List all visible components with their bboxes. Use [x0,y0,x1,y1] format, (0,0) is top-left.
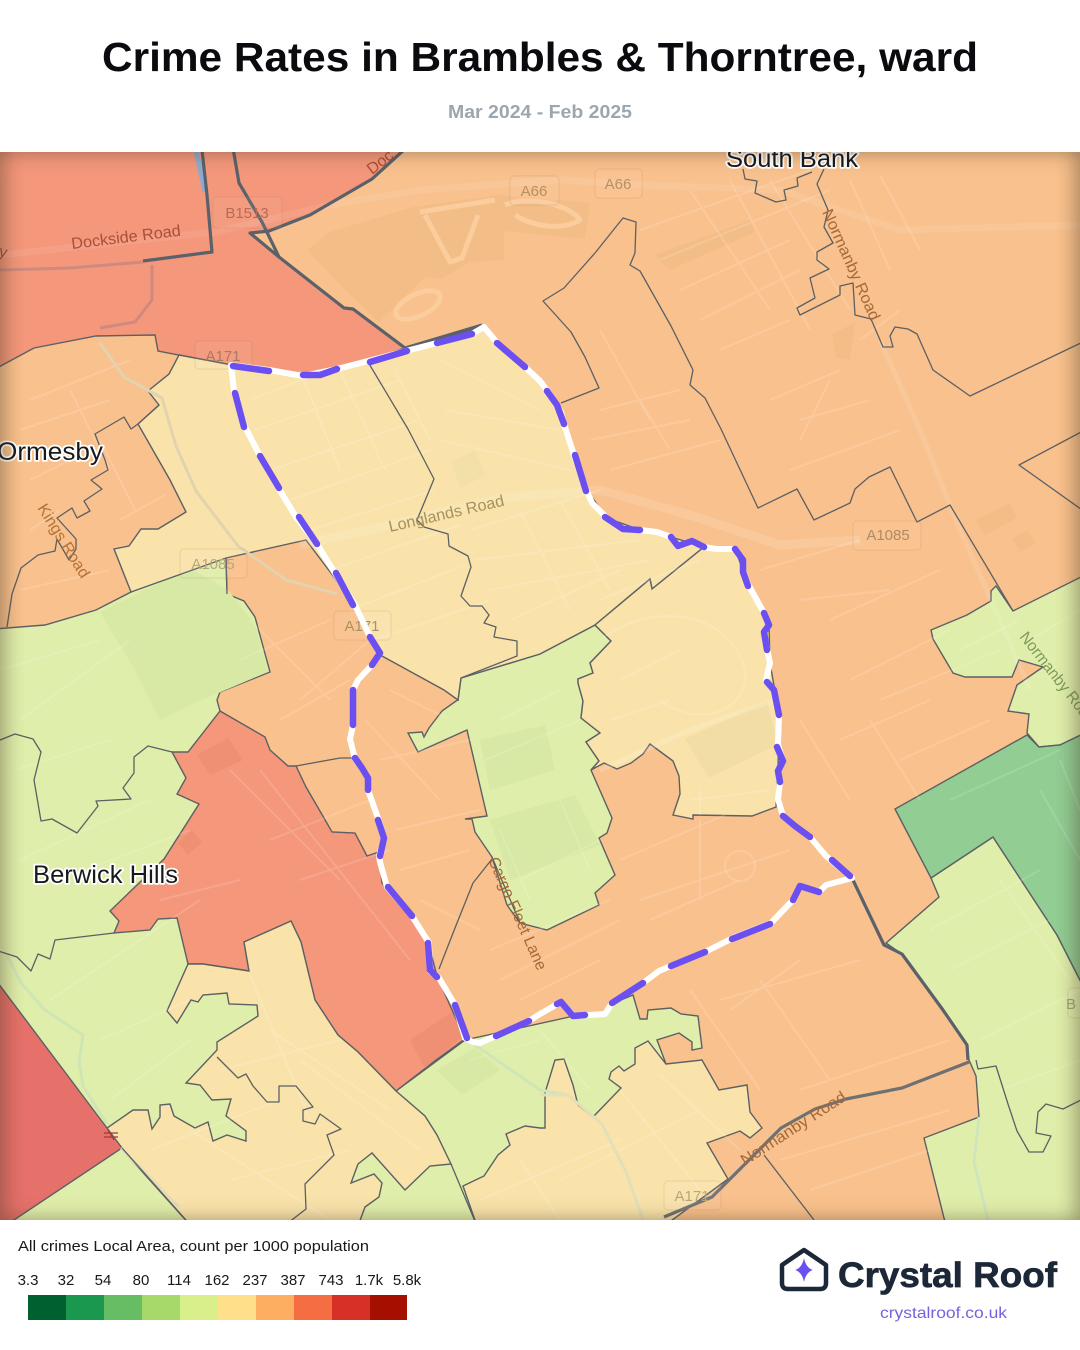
zone: yellow south-west [107,921,451,1226]
railway station marker [104,1130,118,1140]
legend scale values: 162 [204,1272,230,1289]
road shields: A171 [344,618,380,635]
leisure track shapes [392,200,580,325]
legend scale values: 743 [318,1272,344,1289]
road name labels [0,147,1080,1169]
zone: green west and south-west [0,558,702,1226]
streams and faint rail lines [0,262,988,1220]
salmon land-use patches [178,738,462,1068]
thick grey boundary roads [143,148,969,1217]
title: Crime Rates in Brambles & Thorntree, ward [102,34,978,80]
zone: light green north-east [931,575,1080,747]
road name labels: Longlands Road [387,493,506,536]
logo: Crystal Roof [780,1248,1058,1322]
choropleth map [0,152,1080,1220]
zone: yellow north ward [114,327,704,700]
legend colour ramp [28,1295,407,1320]
road name labels: Kings Road [34,501,93,581]
road shields [180,169,1080,1210]
zone: dark green east [895,733,1080,990]
legend scale values: 5.8k [393,1272,422,1289]
road shields: A66 [605,176,631,193]
boundary white casing [231,327,852,1043]
thin interior boundaries [0,169,1080,1226]
road name labels: Dockside Road [70,223,182,253]
legend scale values: 114 [167,1272,191,1289]
tinted land-use patches on orange [307,195,1036,552]
road shields: A171 [205,348,241,365]
base orange area [0,152,1080,1220]
canal [196,150,205,192]
map edge vignette [0,152,1080,1220]
road shields: B [1066,996,1076,1013]
legend scale values: 54 [95,1272,111,1289]
place name labels: Ormesby [0,438,104,466]
tan school patch [685,701,778,778]
road shields: B1513 [225,205,269,222]
place name labels [0,145,859,889]
zone: green inner ward [408,625,615,930]
legend scale values: 80 [133,1272,149,1289]
road shields: A171 [674,1188,710,1205]
ward boundary [231,327,852,1043]
zone: salmon south-west [110,711,465,1091]
date range subtitle: Mar 2024 - Feb 2025 [448,102,632,122]
road shields: A1085 [866,527,910,544]
place name labels: Berwick Hills [33,861,178,889]
road name labels: Normanby Road [738,1089,849,1169]
legend scale values: 3.3 [18,1272,38,1289]
zone: red south-west corner [0,979,122,1226]
legend scale values: 387 [280,1272,306,1289]
street network [0,170,1080,1220]
road name labels: Cargo Fleet Lane [484,855,550,973]
zone: salmon north-west [0,148,406,376]
road name labels: Normanby Road [818,207,883,323]
green land-use patches [100,568,1014,1095]
zone: light green east [886,837,1080,1226]
icon: house with star [782,1250,826,1289]
legend scale values: 237 [242,1272,268,1289]
wordmark: Crystal Roof [838,1256,1057,1295]
legend scale values: 32 [58,1272,74,1289]
zone: yellow east ward [578,547,779,819]
legend [18,1238,422,1320]
legend scale values [18,1272,422,1289]
zone: yellow south [463,1041,762,1226]
website url: crystalroof.co.uk [880,1305,1008,1322]
legend title: All crimes Local Area, count per 1000 population [18,1238,369,1255]
road shields: A1085 [191,556,235,573]
legend scale values: 1.7k [355,1272,384,1289]
road shields: A66 [521,183,547,200]
boundary purple dashes [233,334,850,1038]
